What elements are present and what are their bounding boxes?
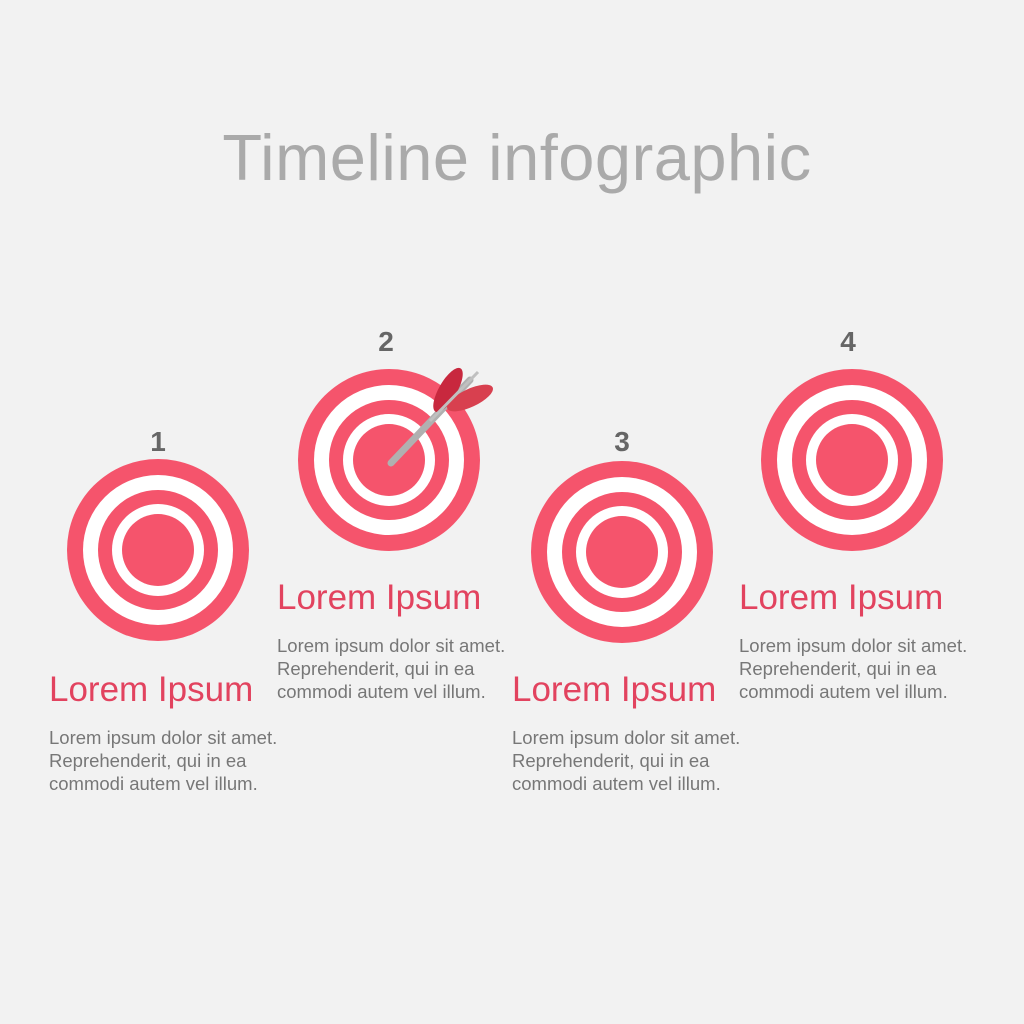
icon: dart (391, 364, 496, 463)
number 2: 2 (378, 326, 394, 357)
step 2 text (277, 578, 505, 702)
target 1 (67, 459, 249, 641)
step 3 text: Lorem ipsum dolor sit amet. (512, 727, 740, 748)
step 4 text: Lorem Ipsum (739, 578, 943, 617)
step 1 text: commodi autem vel illum. (49, 773, 258, 794)
target 3 (531, 461, 713, 643)
step 4 text: commodi autem vel illum. (739, 681, 948, 702)
step 3 text: Reprehenderit, qui in ea (512, 750, 709, 771)
step 2 text: Lorem Ipsum (277, 578, 481, 617)
step 4 text (739, 578, 967, 702)
target 4 (761, 369, 943, 551)
step 2 text: commodi autem vel illum. (277, 681, 486, 702)
step 1 text: Lorem Ipsum (49, 670, 253, 709)
step 1 text: Lorem ipsum dolor sit amet. (49, 727, 277, 748)
step 1 text: Reprehenderit, qui in ea (49, 750, 246, 771)
step 3 text: Lorem Ipsum (512, 670, 716, 709)
number 3: 3 (614, 426, 630, 457)
step 3 text: commodi autem vel illum. (512, 773, 721, 794)
step 4 text: Lorem ipsum dolor sit amet. (739, 635, 967, 656)
number 1: 1 (150, 426, 166, 457)
number 4: 4 (840, 326, 856, 357)
step 3 text (512, 670, 740, 794)
target 2 (298, 369, 480, 551)
step 2 text: Reprehenderit, qui in ea (277, 658, 474, 679)
title: Timeline infographic (222, 121, 812, 194)
step 2 text: Lorem ipsum dolor sit amet. (277, 635, 505, 656)
step 4 text: Reprehenderit, qui in ea (739, 658, 936, 679)
step 1 text (49, 670, 277, 794)
